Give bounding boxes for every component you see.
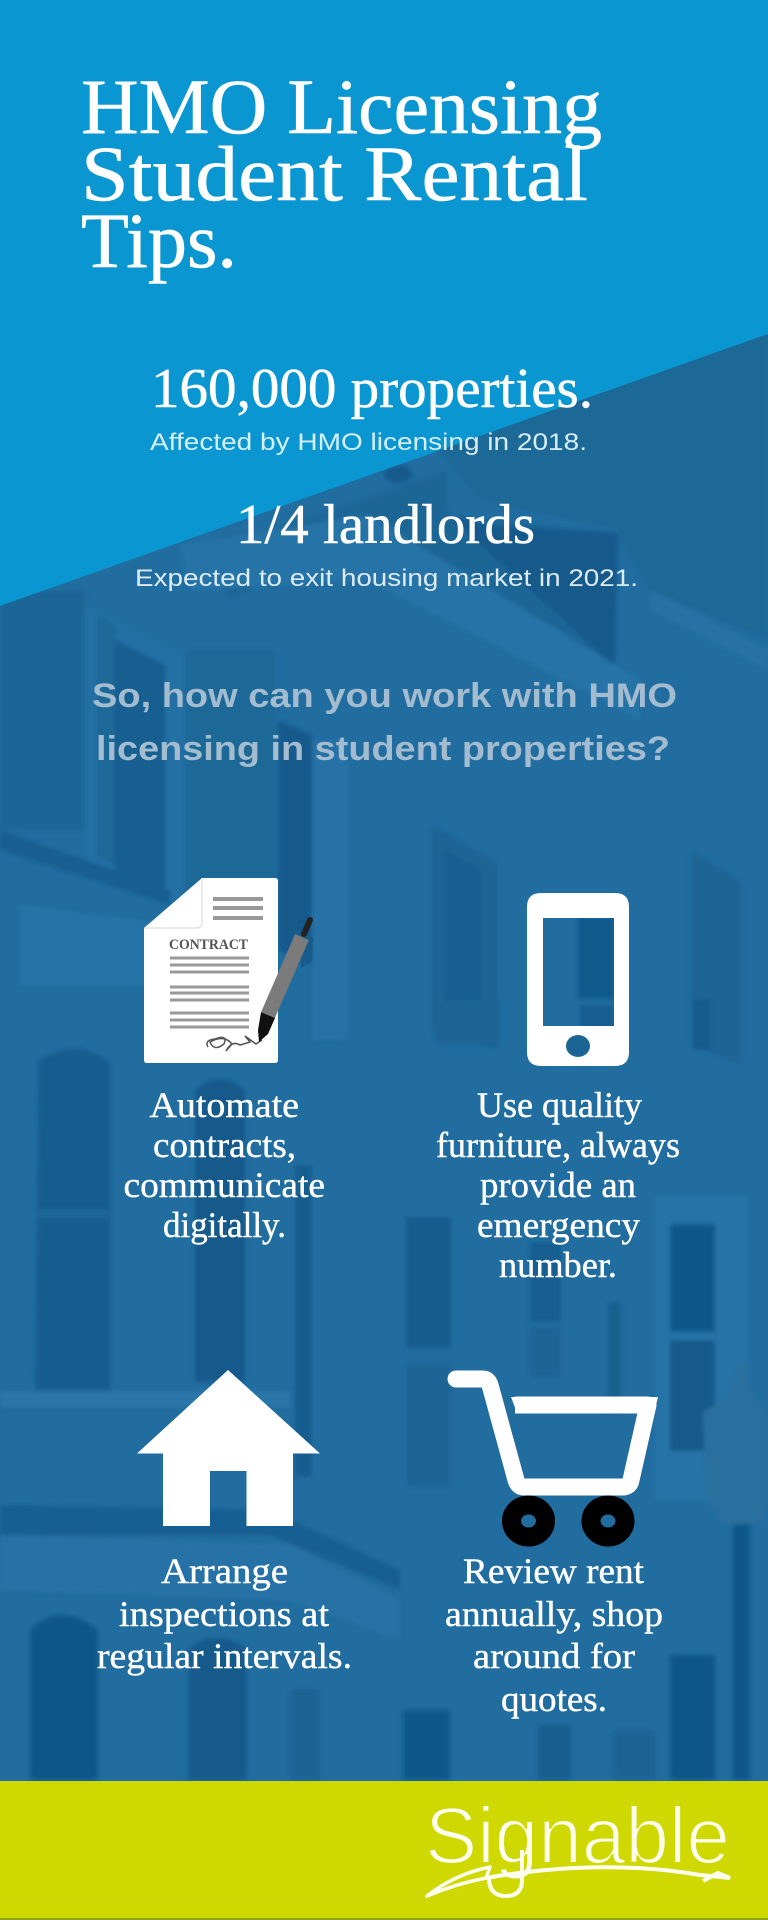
background: tinted building photo: [0, 330, 768, 1790]
logo: Signable: Signable: [425, 1791, 730, 1880]
icon: house: [137, 1370, 320, 1526]
tip: quality furniture: Use quality: [477, 1085, 642, 1125]
tip: automate contracts: contracts,: [153, 1125, 296, 1165]
icon: contract: CONTRACT: [169, 937, 248, 953]
title: Tips.: [81, 197, 237, 284]
tip: quality furniture: emergency: [477, 1205, 640, 1245]
question heading: [92, 677, 677, 768]
icon: shopping cart: [448, 1370, 658, 1537]
tip: automate contracts: [124, 1085, 325, 1245]
stat: 160,000 properties: 160,000 properties.: [151, 358, 593, 420]
icon: smartphone: [527, 893, 629, 1066]
stat: 1/4 landlords: [135, 494, 638, 592]
stat: 160,000 properties: Affected by HMO licensing in 2018.: [150, 429, 587, 456]
stat: 160,000 properties: [150, 358, 593, 456]
question heading: So, how can you work with HMO: [92, 677, 677, 715]
tip: arrange inspections: regular intervals.: [97, 1636, 352, 1676]
footer band: [0, 1781, 768, 1918]
tip: arrange inspections: inspections at: [119, 1594, 329, 1634]
tip: automate contracts: Automate: [150, 1085, 299, 1125]
tip: automate contracts: communicate: [124, 1165, 325, 1205]
tip: review rent: quotes.: [501, 1679, 607, 1719]
tip: quality furniture: provide an: [480, 1165, 636, 1205]
stat: 1/4 landlords: Expected to exit housing market in 2021.: [135, 565, 638, 592]
tip: review rent: annually, shop: [445, 1594, 663, 1634]
stat: 1/4 landlords: 1/4 landlords: [236, 494, 535, 556]
tip: automate contracts: digitally.: [163, 1205, 286, 1245]
tip: review rent: [445, 1551, 663, 1719]
tip: review rent: Review rent: [463, 1551, 644, 1591]
question heading: licensing in student properties?: [96, 730, 670, 768]
tip: arrange inspections: Arrange: [161, 1551, 288, 1591]
tip: quality furniture: furniture, always: [436, 1125, 680, 1165]
icon: contract: [144, 878, 313, 1063]
title: [81, 63, 602, 284]
tip: review rent: around for: [473, 1636, 635, 1676]
title: Student Rental: [81, 130, 588, 217]
title: HMO Licensing: [81, 63, 602, 150]
tip: arrange inspections: [97, 1551, 352, 1676]
tip: quality furniture: [436, 1085, 680, 1285]
tip: quality furniture: number.: [499, 1245, 617, 1285]
